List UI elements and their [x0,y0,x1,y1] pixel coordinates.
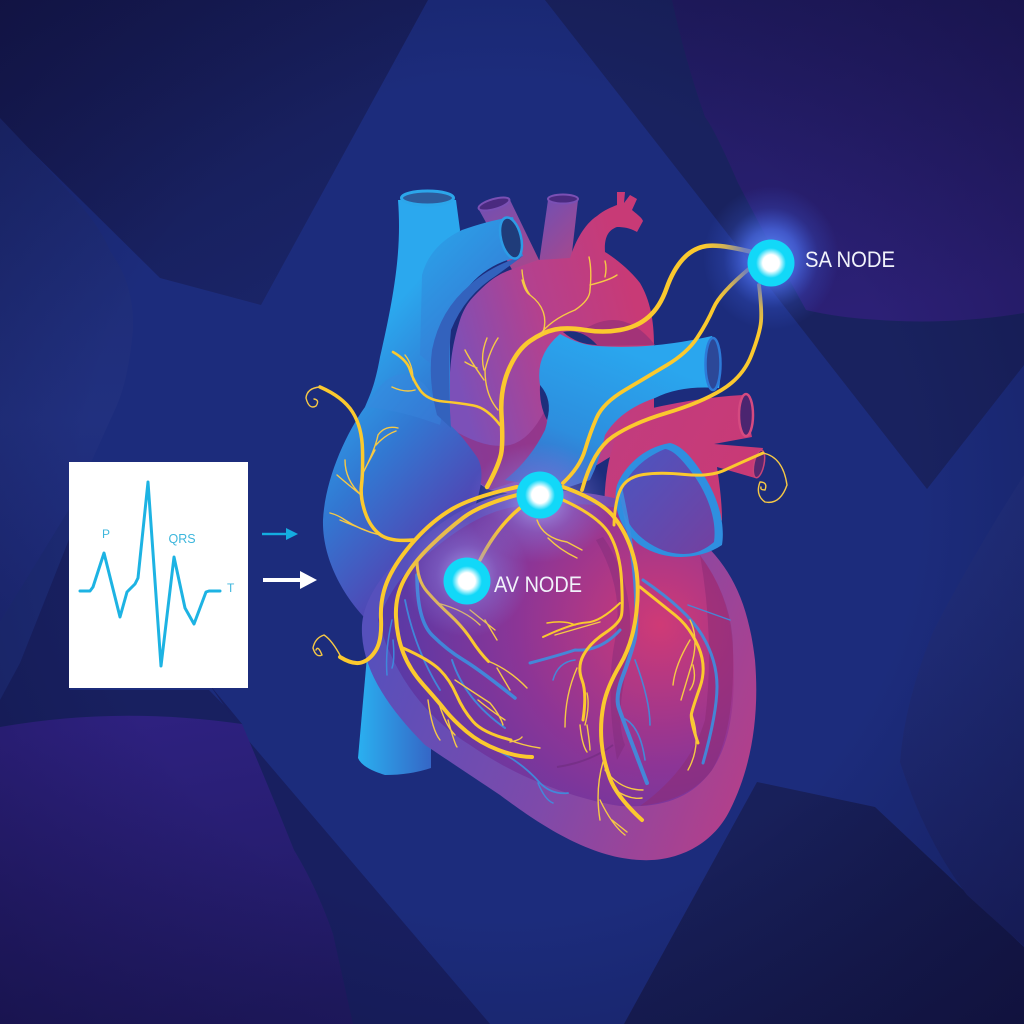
right vessel opening upper [739,394,753,436]
arch shadow band [431,256,523,428]
dark gap beside artery [540,385,549,420]
glow: SA node halo [703,186,839,330]
arch opening [496,215,526,261]
atrial highlight [365,374,441,425]
pulmonary branch right [538,200,578,270]
ventricle inner chamber [378,504,734,806]
interventricular shadow [596,537,630,760]
label T: T [227,581,235,595]
central glow area [468,443,612,563]
arrow: white [263,571,317,589]
label QRS: QRS [168,532,196,546]
label: AV NODE: AV NODE [494,572,582,597]
vessels: blue coronary branches [387,487,730,803]
nerves: fine yellow branches [306,257,787,835]
right vessel opening lower [751,449,767,479]
pulmonary branch left [478,200,540,275]
aortic arch shadow [575,320,655,346]
pulmonary artery [505,334,720,490]
apex shadow line [557,745,613,767]
vena cava opening [402,191,454,205]
node: central AV bundle [516,472,564,518]
pulmonary branch opening right [548,194,578,204]
arrow: cyan [262,528,298,540]
node: SA node [748,240,794,286]
aorta and pulmonary trunk body [449,192,654,500]
left atrium rim [616,443,723,557]
ECG trace [80,482,220,666]
glow: AV node halo [405,513,529,637]
pulmonary artery opening [706,338,720,390]
panel: ECG card [69,462,248,688]
pulmonary branch opening left [477,195,511,213]
right vessels [600,395,763,565]
inferior vena cava [358,600,431,775]
superior vena cava and right atrium [323,200,481,640]
left atrium [621,449,715,554]
label P: P [102,527,110,541]
nerves: thick yellow conduction paths [320,246,763,820]
right inner shadow [640,555,733,806]
heart [306,186,839,860]
node: AV node [444,558,490,604]
ventricle outer wall [362,490,756,860]
dark gap under arch [563,331,597,345]
label: SA NODE: SA NODE [805,247,895,272]
blue arch vessel [420,217,523,365]
aorta lower shadow [450,410,548,490]
